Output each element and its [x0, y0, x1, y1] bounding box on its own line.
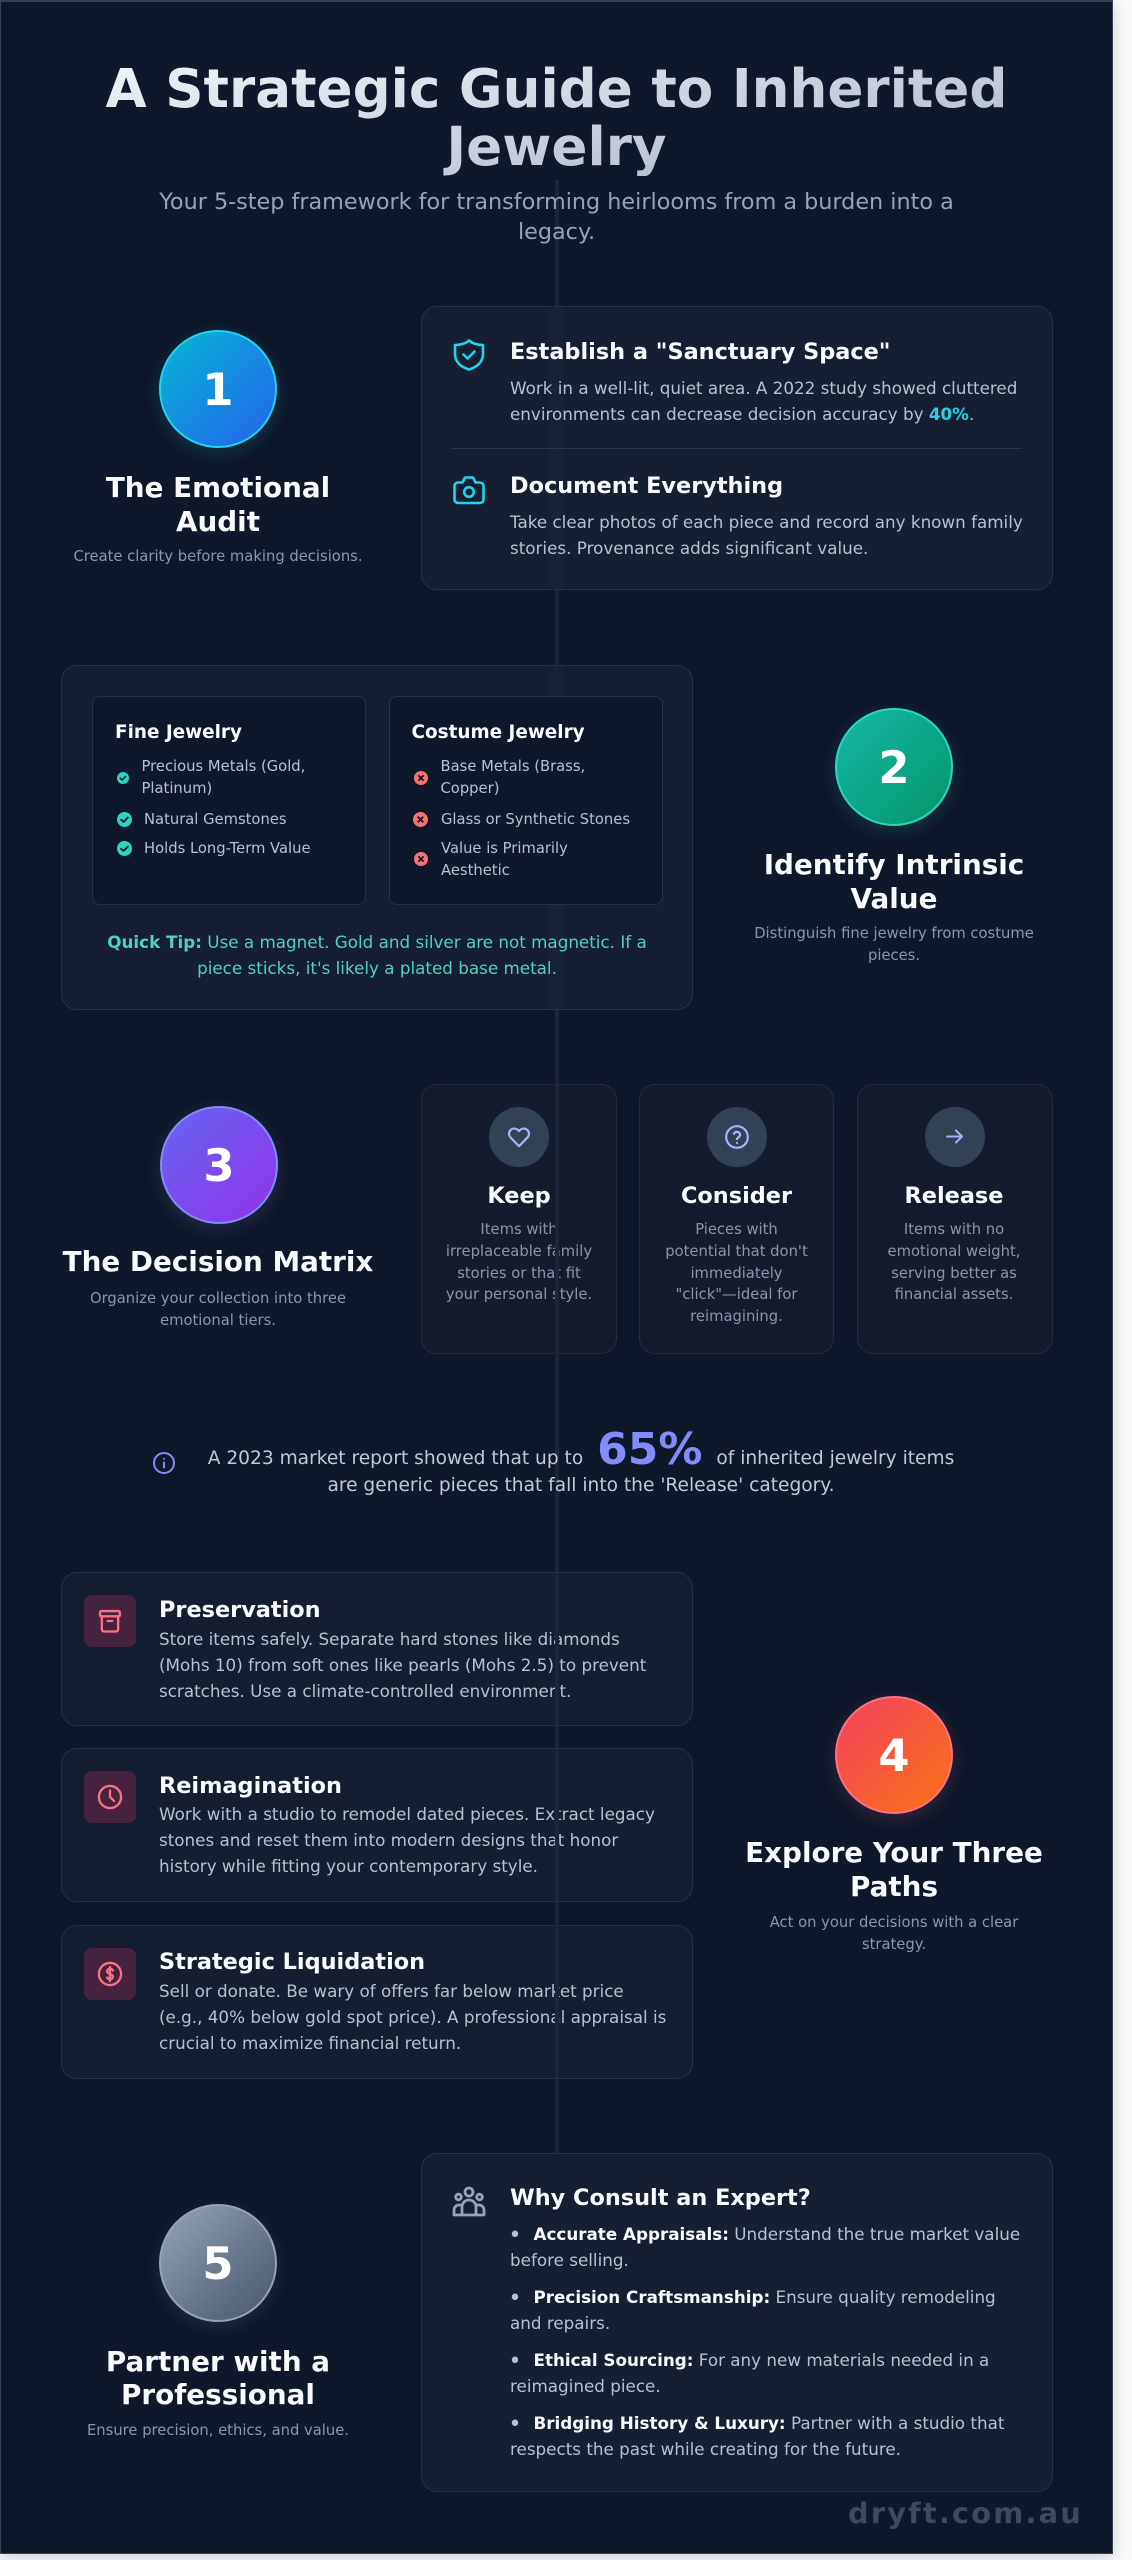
text: release: Items with no: [904, 1221, 1004, 1238]
subtitle: [159, 189, 954, 245]
panel: fine jewelry: [92, 696, 366, 905]
step 4 description: Act on your decisions with a clear: [770, 1914, 1018, 1931]
step 4 description: strategy.: [862, 1936, 926, 1953]
heading: reimagination: Reimagination: [159, 1773, 342, 1799]
text: document everything: stories. Provenance adds significant value.: [510, 538, 868, 558]
list item: Natural Gemstones: [144, 811, 287, 828]
text: preservation: scratches. Use a climate-controlled environment.: [159, 1680, 571, 1700]
text: consider: "click"—ideal for: [676, 1286, 797, 1303]
heading: costume jewelry: Costume Jewelry: [412, 722, 585, 743]
step 3 number: 3: [203, 1139, 235, 1192]
step 4 description: [770, 1914, 1018, 1953]
expert benefits list: •: [508, 2412, 521, 2437]
heading: preservation: Preservation: [159, 1597, 321, 1623]
icon: archive: [84, 1595, 136, 1647]
text: preservation: [159, 1628, 646, 1700]
text: strategic liquidation: Sell or donate. Be wary of offers far below market price: [159, 1980, 624, 2000]
expert benefits list: and repairs.: [510, 2313, 610, 2333]
text: consider: reimagining.: [690, 1308, 783, 1325]
statistic callout: are generic pieces that fall into the 'Release' category.: [327, 1474, 835, 1496]
icon: heart: [489, 1107, 549, 1167]
icon: cross: [413, 812, 428, 827]
heading: strategic liquidation: Strategic Liquidation: [159, 1949, 425, 1975]
step 4 number: [835, 1696, 953, 1814]
step 2 title: Value: [851, 882, 937, 915]
card: strategic liquidation: [61, 1925, 693, 2079]
step 4 title: Explore Your Three: [745, 1836, 1043, 1869]
text: consider: immediately: [690, 1265, 783, 1282]
faint line through panel 1: [551, 306, 563, 590]
text: document everything: Take clear photos of each piece and record any known family: [510, 512, 1023, 532]
heading: sanctuary space: Establish a "Sanctuary Space": [510, 339, 890, 365]
expert benefits list: Accurate Appraisals: Understand the true market value: [534, 2224, 1020, 2244]
text: keep: stories or that fit: [457, 1265, 581, 1282]
expert benefits list: reimagined piece.: [510, 2376, 661, 2396]
text: strategic liquidation: crucial to maximize financial return.: [159, 2032, 461, 2052]
text: reimagination: history while fitting your contemporary style.: [159, 1856, 538, 1876]
text: strategic liquidation: (e.g., 40% below gold spot price). A professional appraisal is: [159, 2006, 666, 2026]
text: keep: [446, 1221, 592, 1303]
text: sanctuary space: environments can decrease decision accuracy by 40%.: [510, 404, 974, 424]
heading: consider: Consider: [681, 1183, 792, 1209]
text: consider: [665, 1221, 808, 1325]
faint line through panel 2: [551, 665, 563, 1010]
step 1 title: [106, 471, 330, 538]
list item: Platinum): [142, 780, 212, 797]
heading: why consult an expert: Why Consult an Expert?: [510, 2185, 811, 2211]
step 2 description: [754, 925, 1034, 964]
step 1 description: Create clarity before making decisions.: [73, 548, 363, 565]
icon: check: [117, 812, 132, 827]
step 1 title: Audit: [176, 505, 260, 538]
text: reimagination: Work with a studio to remodel dated pieces. Extract legacy: [159, 1804, 655, 1824]
panel: why consult an expert: [421, 2153, 1053, 2492]
list item: [142, 758, 305, 797]
timeline line behind cards 1 and 2: [555, 180, 559, 2153]
watermark: dryft.com.au: [848, 2496, 1083, 2530]
text: release: emotional weight,: [888, 1243, 1020, 1260]
text: release: [888, 1221, 1020, 1303]
step 2 number: 2: [878, 741, 910, 794]
list item: Aesthetic: [441, 862, 510, 879]
step 3 description: emotional tiers.: [160, 1312, 276, 1329]
heading: release: Release: [905, 1183, 1003, 1209]
step 3 description: [90, 1290, 346, 1329]
panel: step 1 actions: [421, 306, 1053, 590]
list item: [441, 840, 568, 879]
step 5 title: Partner with a: [106, 2344, 330, 2378]
panel: step 2 comparison: [61, 665, 693, 1010]
timeline line over step 3 and 4 cards: [555, 1085, 559, 2023]
text: keep: your personal style.: [446, 1286, 592, 1303]
subtitle: Your 5-step framework for transforming heirlooms from a burden into a: [159, 189, 954, 215]
step 2 title: [764, 848, 1024, 915]
step 1 number: 1: [202, 363, 234, 416]
icon: info: [153, 1452, 175, 1474]
step 3 description: Organize your collection into three: [90, 1290, 346, 1307]
text: sanctuary space: Work in a well-lit, quiet area. A 2022 study showed cluttered: [510, 378, 1017, 398]
expert benefits list: Bridging History & Luxury: Partner with a studio that: [534, 2413, 1004, 2433]
list item: Precious Metals (Gold,: [142, 758, 305, 775]
text: reimagination: stones and reset them into modern designs that honor: [159, 1830, 618, 1850]
list item: Copper): [440, 780, 499, 797]
icon: cross: [414, 771, 428, 785]
expert benefits list: respects the past while creating for the future.: [510, 2439, 901, 2459]
expert benefits list: [508, 2222, 1020, 2459]
card: keep: [421, 1084, 617, 1354]
step 2 number: [835, 708, 953, 826]
card: preservation: [61, 1572, 693, 1726]
icon: check: [117, 772, 129, 784]
text: keep: Items with: [480, 1221, 558, 1238]
text: strategic liquidation: [159, 1980, 666, 2052]
card: release: [857, 1084, 1053, 1354]
expert benefits list: •: [508, 2222, 521, 2248]
card: reimagination: [61, 1748, 693, 1902]
icon: question: [707, 1107, 767, 1167]
list item: Glass or Synthetic Stones: [441, 811, 630, 828]
subtitle: legacy.: [518, 219, 595, 245]
quick tip: piece sticks, it's likely a plated base metal.: [197, 958, 557, 978]
panel: costume jewelry: [389, 696, 663, 905]
text: consider: potential that don't: [665, 1243, 808, 1260]
step 5 number: 5: [202, 2237, 234, 2290]
step 2 title: Identify Intrinsic: [764, 848, 1024, 881]
step 3 number: [160, 1106, 278, 1224]
expert benefits list: before selling.: [510, 2250, 629, 2270]
text: keep: irreplaceable family: [446, 1243, 592, 1260]
step 4 number: 4: [878, 1729, 910, 1782]
title: [106, 58, 1007, 178]
text: reimagination: [159, 1804, 655, 1876]
list item: Value is Primarily: [441, 840, 568, 857]
text: consider: Pieces with: [695, 1221, 778, 1238]
icon: camera: [453, 476, 485, 504]
heading: fine jewelry: Fine Jewelry: [115, 722, 242, 743]
text: release: financial assets.: [895, 1286, 1013, 1303]
list item: Base Metals (Brass,: [440, 758, 585, 775]
icon: check: [117, 841, 132, 856]
step 4 title: Paths: [850, 1870, 938, 1903]
heading: document everything: Document Everything: [510, 473, 783, 499]
heading: keep: Keep: [487, 1183, 551, 1209]
expert benefits list: Precision Craftsmanship: Ensure quality remodeling: [534, 2287, 996, 2307]
icon: team: [452, 2186, 486, 2216]
icon: cross: [414, 852, 428, 866]
step 4 title: [745, 1836, 1043, 1903]
step 2 description: pieces.: [868, 947, 920, 964]
step 5 description: Ensure precision, ethics, and value.: [87, 2422, 349, 2439]
quick tip: Quick Tip: Use a magnet. Gold and silver are not magnetic. If a: [107, 932, 647, 952]
statistic callout: A 2023 market report showed that up to 65% of inherited jewelry items: [208, 1424, 954, 1475]
text: release: serving better as: [891, 1265, 1017, 1282]
expert benefits list: •: [508, 2349, 521, 2374]
step 5 number: [159, 2204, 277, 2322]
list item: [440, 758, 585, 797]
title: Jewelry: [446, 116, 667, 178]
list item: Holds Long-Term Value: [144, 840, 311, 857]
step 3 title: The Decision Matrix: [63, 1245, 373, 1278]
step 1 title: The Emotional: [106, 471, 330, 504]
text: preservation: (Mohs 10) from soft ones like pearls (Mohs 2.5) to prevent: [159, 1654, 646, 1674]
icon: clock: [84, 1771, 136, 1823]
title: A Strategic Guide to Inherited: [106, 58, 1007, 120]
icon: arrow: [925, 1107, 985, 1167]
text: sanctuary space: [510, 378, 1017, 424]
icon: dollar: [84, 1948, 136, 2000]
expert benefits list: Ethical Sourcing: For any new materials needed in a: [534, 2350, 989, 2370]
card: consider: [639, 1084, 834, 1354]
expert benefits list: •: [508, 2286, 521, 2311]
quick tip: [107, 932, 647, 978]
step 2 description: Distinguish fine jewelry from costume: [754, 925, 1034, 942]
text: preservation: Store items safely. Separate hard stones like diamonds: [159, 1628, 620, 1648]
step 1 number: [159, 330, 277, 448]
icon: shield check: [454, 339, 484, 371]
text: document everything: [510, 512, 1023, 558]
step 5 title: Professional: [121, 2378, 315, 2411]
step 5 title: [106, 2344, 330, 2411]
